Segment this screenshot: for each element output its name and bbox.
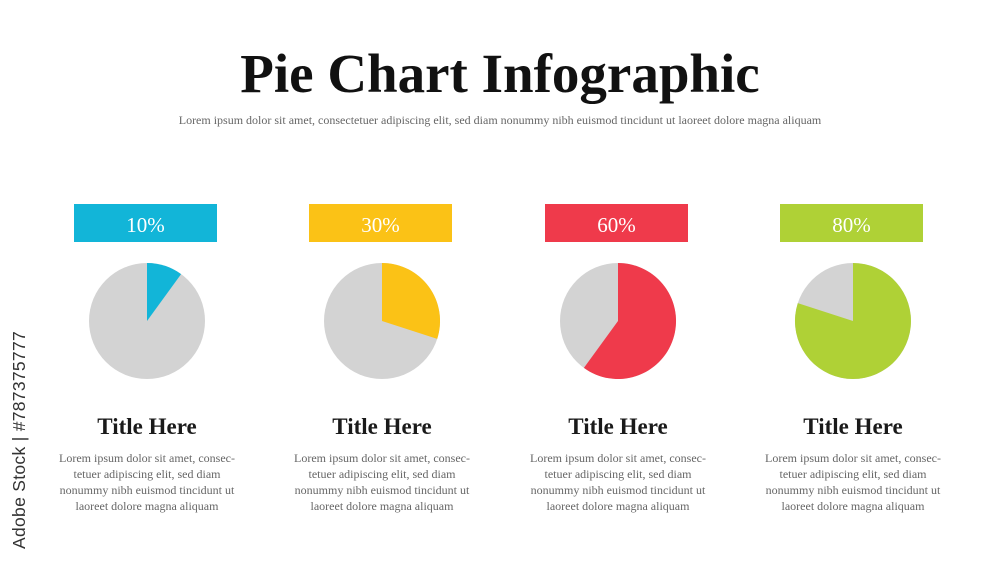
panel: 80%: [765, 204, 941, 513]
text: nonummy nibh euismod tincidunt ut: [295, 483, 469, 497]
text: tetuer adipiscing elit, sed diam: [780, 467, 926, 481]
text: laoreet dolore magna aliquam: [311, 499, 453, 513]
pie 80%: [794, 263, 911, 379]
text: [765, 451, 941, 513]
watermark text: Adobe Stock | #787375777: [9, 331, 29, 549]
badge 80%: [780, 204, 923, 242]
pie 60%: [560, 263, 676, 379]
panel: 60%: [530, 204, 706, 513]
heading: Title Here: [97, 414, 197, 439]
badge 10%: [74, 204, 217, 242]
heading: Title Here: [332, 414, 432, 439]
text: tetuer adipiscing elit, sed diam: [545, 467, 691, 481]
text: [59, 451, 235, 513]
text: laoreet dolore magna aliquam: [76, 499, 218, 513]
panel: 10%: [59, 204, 235, 513]
badge 10%: 10%: [126, 213, 165, 237]
badge 30%: 30%: [361, 213, 400, 237]
text: nonummy nibh euismod tincidunt ut: [60, 483, 234, 497]
subtitle: Lorem ipsum dolor sit amet, consectetuer adipiscing elit, sed diam nonummy nibh euismod tincidunt ut laoreet dolore magna aliquam: [179, 113, 821, 127]
text: laoreet dolore magna aliquam: [782, 499, 924, 513]
badge 30%: [309, 204, 452, 242]
panel: 30%: [294, 204, 470, 513]
text: [294, 451, 470, 513]
badge 60%: 60%: [597, 213, 636, 237]
heading: Title Here: [803, 414, 903, 439]
text: tetuer adipiscing elit, sed diam: [309, 467, 455, 481]
text: Lorem ipsum dolor sit amet, consec-: [765, 451, 941, 465]
badge 60%: [545, 204, 688, 242]
text: tetuer adipiscing elit, sed diam: [74, 467, 220, 481]
title: Pie Chart Infographic: [240, 43, 760, 104]
text: [530, 451, 706, 513]
text: Lorem ipsum dolor sit amet, consec-: [294, 451, 470, 465]
pie 30%: [324, 263, 440, 379]
text: Lorem ipsum dolor sit amet, consec-: [59, 451, 235, 465]
heading: Title Here: [568, 414, 668, 439]
text: nonummy nibh euismod tincidunt ut: [766, 483, 940, 497]
text: Lorem ipsum dolor sit amet, consec-: [530, 451, 706, 465]
pie 10%: [89, 263, 205, 379]
badge 80%: 80%: [832, 213, 871, 237]
text: nonummy nibh euismod tincidunt ut: [531, 483, 705, 497]
text: laoreet dolore magna aliquam: [547, 499, 689, 513]
